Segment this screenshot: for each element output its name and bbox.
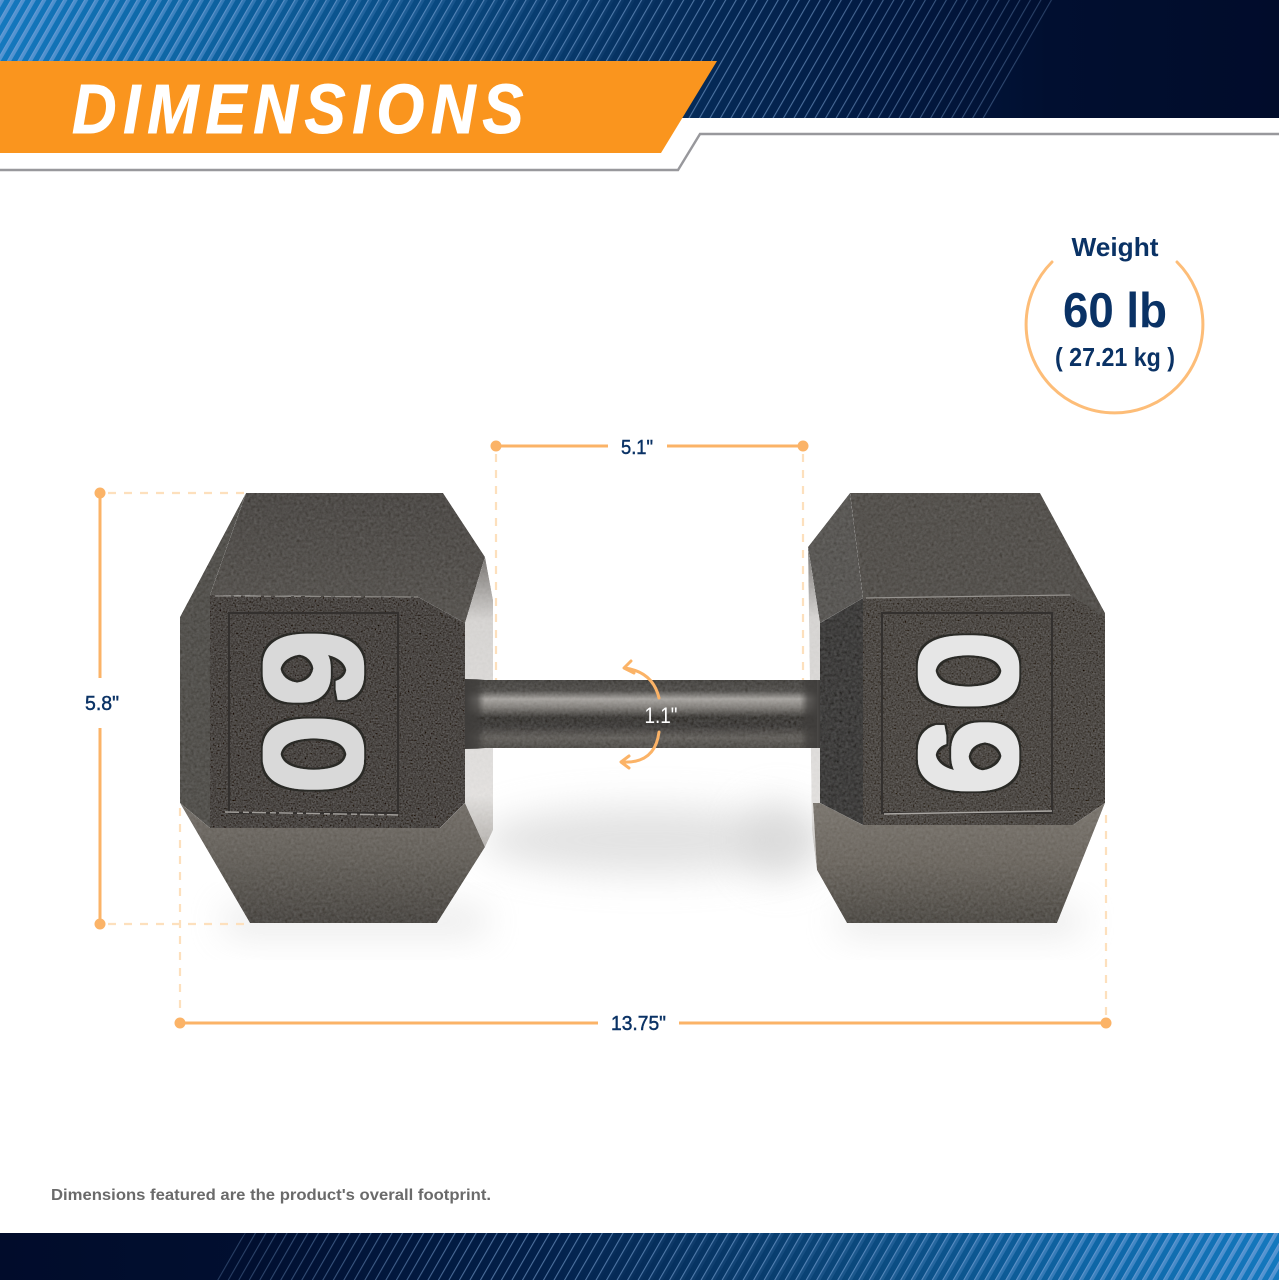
panel highlight [884,811,1052,814]
dimension: head height 5.8: 5.8" [85,693,119,715]
cast weight number: 60 [240,631,387,804]
top face [210,493,485,623]
dumbbell right head [808,493,1105,923]
dashed guide lines [108,454,1106,1016]
dimension: overall length 13.75 [174,1013,1112,1035]
top face [850,493,1105,620]
title: DIMENSIONS [72,69,523,148]
front edge highlight [215,596,418,597]
light inner side [808,547,820,870]
white header cut-out with grey outline [0,118,683,170]
floor shadow [225,800,1080,934]
lower arrow [621,732,659,768]
orange title ribbon [0,61,717,153]
dimension: handle diameter 1.1 with arrows [621,661,678,768]
panel highlight [225,812,398,815]
diameter label: 1.1" [644,703,678,728]
cast weight number: 60 [895,621,1042,794]
weight ring [1026,262,1203,413]
lower face [180,803,485,923]
dark inner face [820,598,863,825]
front edge highlight [866,595,1070,598]
header outline stroke [0,134,1279,170]
weight callout [1026,232,1203,413]
front face [210,595,465,828]
upper arrow [624,661,659,698]
footer banner [0,1233,1279,1280]
light inner side [465,557,493,847]
dimension: handle length 5.1 [490,437,808,459]
recessed label panel [882,613,1052,813]
weight in kilograms: ( 27.21 kg ) [1055,342,1175,372]
dumbbell left head [180,493,493,923]
header banner background [0,0,1279,118]
dimension: handle length 5.1: 5.1" [621,437,653,459]
recessed label panel [229,613,398,813]
dumbbell handle [465,679,820,749]
left chamfer [180,493,246,828]
left chamfer [808,493,863,623]
weight in pounds: 60 lb [1063,284,1167,338]
footnote: Dimensions featured are the product's overall footprint. [51,1187,491,1204]
dimension: overall length 13.75: 13.75" [611,1013,666,1035]
dimension: head height 5.8 [85,488,119,930]
lower face [813,803,1105,923]
front face [863,595,1105,825]
weight label: Weight [1072,232,1159,262]
